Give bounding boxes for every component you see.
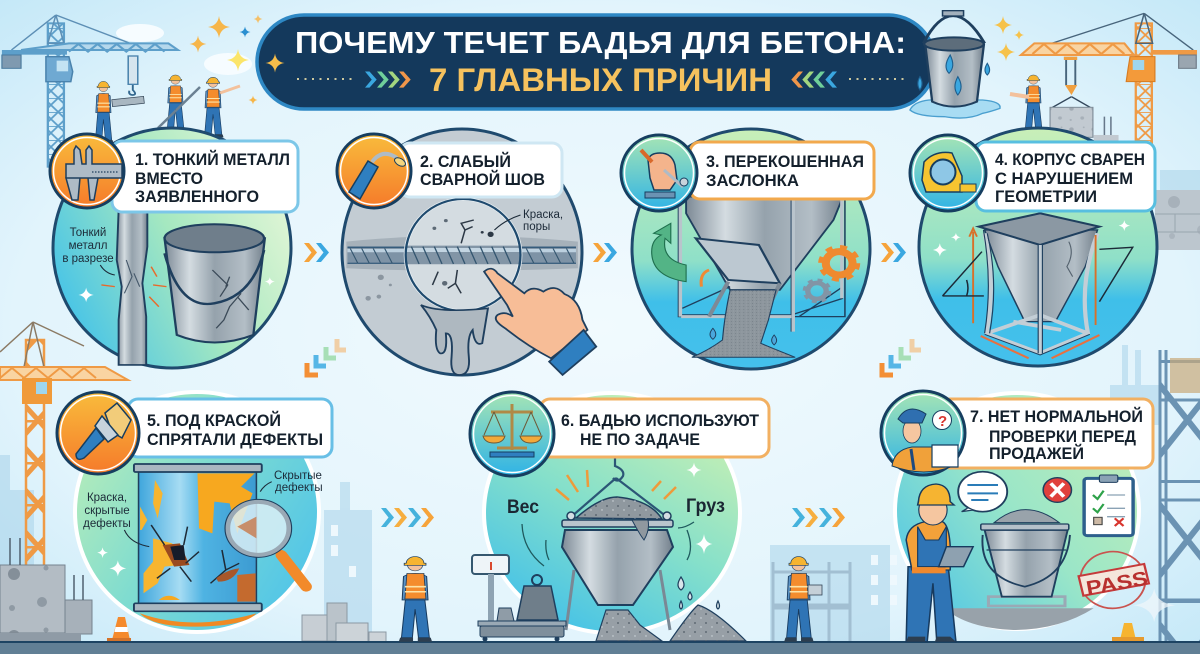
panel 1 badge: caliper	[50, 134, 124, 208]
panel 3 heading: ЗАСЛОНКА	[706, 171, 799, 190]
panel 1 heading: ЗАЯВЛЕННОГО	[135, 187, 259, 206]
sky clouds and sparkles	[116, 14, 1024, 104]
skyline left	[0, 455, 372, 645]
panel 7 heading	[970, 407, 1143, 463]
panel 2 heading: СВАРНОЙ ШОВ	[420, 170, 545, 189]
hook and slings	[571, 458, 667, 517]
crane: orange top-right	[1021, 13, 1197, 145]
panel 5 heading: 5. ПОД КРАСКОЙ	[147, 411, 281, 430]
concrete blocks: lower-left	[0, 538, 386, 642]
panel 2 note	[523, 209, 563, 233]
title star	[266, 54, 284, 72]
panel 4 illustration	[933, 213, 1133, 358]
word: load: Груз	[686, 496, 725, 517]
scaffold centre	[773, 562, 850, 642]
panel 6 heading: 6. БАДЬЮ ИСПОЛЬЗУЮТ	[561, 411, 760, 430]
panel 3 label	[690, 142, 874, 199]
panel 2: weak weld	[337, 129, 596, 375]
stamp word: PASS	[1085, 568, 1149, 600]
panel 6 heading: НЕ ПО ЗАДАЧЕ	[580, 430, 700, 449]
orange crane: lower-left	[0, 322, 128, 640]
concrete wall right	[1155, 190, 1200, 250]
panel 3 badge: hand with lever	[621, 135, 697, 211]
panel 5 label	[128, 399, 332, 457]
panel 4 heading: ГЕОМЕТРИИ	[995, 187, 1097, 206]
worker: top-right	[1010, 75, 1043, 130]
question mark: ?	[938, 413, 947, 430]
panel 5 right note	[274, 470, 323, 494]
arrows: down-left connector A	[307, 339, 346, 375]
arrows: bottom row left	[381, 508, 434, 527]
right chevrons	[791, 72, 837, 88]
panel 7 label	[940, 399, 1153, 468]
panel 1 heading: 1. ТОНКИЙ МЕТАЛЛ	[135, 150, 290, 169]
panel 4 badge: tape measure	[910, 135, 986, 211]
panel 1 illustration	[78, 210, 275, 365]
panel 2 label	[400, 143, 562, 197]
panel 3 heading	[706, 152, 864, 190]
panel 7 heading: ПРОДАЖЕЙ	[989, 444, 1084, 463]
panel 1: thin metal	[50, 128, 298, 368]
panel 6 badge: balance scale	[470, 392, 554, 476]
panel 1 note: Тонкий	[70, 227, 106, 239]
impact marks	[556, 470, 676, 500]
panel 5 heading: СПРЯТАЛИ ДЕФЕКТЫ	[147, 430, 323, 449]
panel 2 note: поры	[523, 221, 550, 233]
panel 2 heading	[420, 152, 545, 189]
arrows: down-left connector B	[882, 339, 921, 375]
panel 7 heading: 7. НЕТ НОРМАЛЬНОЙ	[970, 407, 1143, 426]
panel 1 heading: ВМЕСТО	[135, 169, 203, 188]
word: weight: Вес	[507, 497, 539, 518]
hopper bucket	[576, 497, 662, 519]
panel 4 disc	[919, 128, 1157, 366]
panel 5 badge: paint brush	[57, 392, 139, 474]
right dots	[849, 78, 906, 80]
panel 5 heading	[147, 411, 323, 449]
panel 1 heading	[135, 150, 290, 206]
panel 1 note: в разрезе	[62, 253, 114, 265]
traffic cone right	[1112, 623, 1144, 641]
left chevrons	[365, 72, 411, 88]
ground	[0, 641, 1200, 654]
panel 1 note	[62, 227, 114, 265]
panel 4 heading	[995, 150, 1145, 206]
worker: centre ground	[399, 557, 432, 642]
panel 5 left note	[83, 492, 131, 530]
panel 5 right note: Скрытые	[274, 470, 322, 482]
panel 5: hidden defects	[57, 392, 332, 632]
panel 7 disc	[895, 393, 1139, 629]
panel 5 left note: дефекты	[83, 518, 131, 530]
panel 6 disc	[484, 393, 740, 633]
panel 4: body geometry	[910, 128, 1157, 366]
panel 6 label	[540, 399, 769, 457]
panel 7 heading: ПРОВЕРКИ ПЕРЕД	[989, 427, 1136, 446]
crane: blue top-left	[2, 15, 178, 167]
panel 2 disc	[342, 129, 582, 375]
panel 2 heading: 2. СЛАБЫЙ	[420, 152, 511, 171]
distant windows	[331, 525, 897, 605]
panel 5 illustration	[97, 464, 306, 627]
panel 5 left note: скрытые	[84, 505, 130, 517]
scales with weight	[472, 555, 566, 642]
worker: on scaffold	[784, 557, 822, 642]
left dots	[297, 78, 354, 80]
panel 3 illustration	[652, 197, 858, 357]
panel 6: wrong use	[470, 392, 769, 642]
icon: leaking bucket	[910, 11, 1000, 118]
panel 4 heading: 4. КОРПУС СВАРЕН	[995, 150, 1145, 169]
panel 1 note: металл	[69, 240, 107, 252]
panel 3: skewed gate	[621, 129, 874, 369]
panel 3 heading: 3. ПЕРЕКОШЕННАЯ	[706, 152, 864, 171]
panel 2 badge: welding torch	[337, 134, 411, 208]
panel 3 disc	[632, 129, 870, 369]
scaffold right	[1160, 350, 1200, 642]
title line 2: 7 ГЛАВНЫХ ПРИЧИН	[429, 62, 772, 98]
skyline right	[770, 170, 1200, 641]
panel 6 illustration	[522, 458, 720, 630]
arrows: top row	[304, 243, 906, 262]
panel 4 label	[976, 142, 1155, 211]
panel 4 heading: С НАРУШЕНИЕМ	[995, 169, 1133, 188]
concrete piles	[596, 605, 746, 641]
panel 2 note: Краска,	[523, 209, 563, 221]
arrows: bottom row right	[792, 508, 845, 527]
panel 5 right note: дефекты	[275, 482, 323, 494]
panel 2 illustration	[346, 199, 596, 375]
panel 7 badge: inspector	[881, 391, 965, 475]
panel 1 label	[112, 141, 298, 212]
panel 6 heading	[561, 411, 760, 449]
panel 1 disc	[53, 128, 291, 368]
panel 7 illustration	[906, 472, 1175, 642]
panel 7: no inspection	[881, 391, 1175, 642]
title line 1: ПОЧЕМУ ТЕЧЕТ БАДЬЯ ДЛЯ БЕТОНА:	[295, 25, 906, 60]
panel 5 left note: Краска,	[87, 492, 127, 504]
drops	[678, 577, 720, 609]
workers: top-left group	[94, 75, 240, 143]
traffic cone left	[107, 617, 131, 641]
panel 5 disc	[75, 392, 319, 632]
title banner	[257, 15, 935, 109]
